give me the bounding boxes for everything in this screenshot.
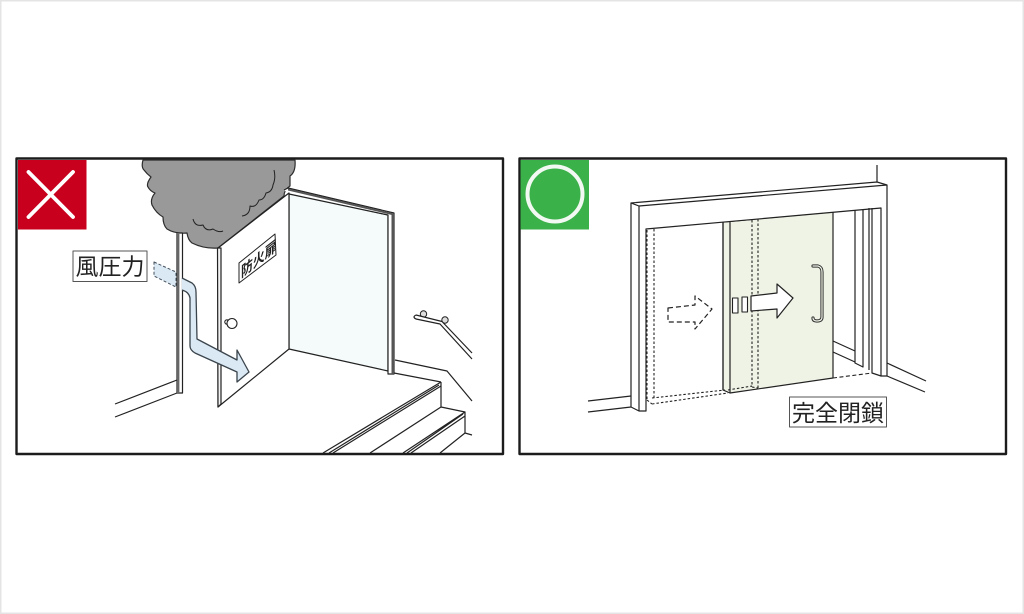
sliding door leaf [723,212,833,393]
icon: green circle badge [520,160,589,230]
door pulls [732,297,748,313]
wind arrow [182,278,249,382]
door sign: 防火扉 [241,236,277,282]
solid direction arrow [751,284,793,318]
left wall post [177,233,182,393]
open fire door leaf [218,193,289,407]
wall line above header [876,165,878,182]
door handle [813,266,822,321]
pocket door jamb [855,208,881,376]
handrail [414,311,472,359]
smoke cloud [142,160,295,248]
door frame [284,188,394,374]
panel: incorrect example, door forced open by wind pressure [16,158,503,454]
stairs [323,382,472,453]
wind arrow, dashed start [154,262,176,287]
hidden door lines [647,219,872,404]
wall baseboard [115,380,177,417]
baseboards [588,341,926,412]
smoke inner curls [193,170,275,232]
label: fully closed: 完全閉鎖 [792,400,884,426]
door leaf edge [723,221,730,393]
floor edge and wall [394,360,472,401]
icon: red cross badge [18,160,86,230]
label: wind pressure: 風圧力 [76,254,144,280]
dashed direction arrow [668,296,712,329]
back wall panel [289,193,388,371]
door knob [225,318,237,328]
panel: correct example, door fully closed [520,158,1006,454]
frame: header and posts [631,182,887,411]
